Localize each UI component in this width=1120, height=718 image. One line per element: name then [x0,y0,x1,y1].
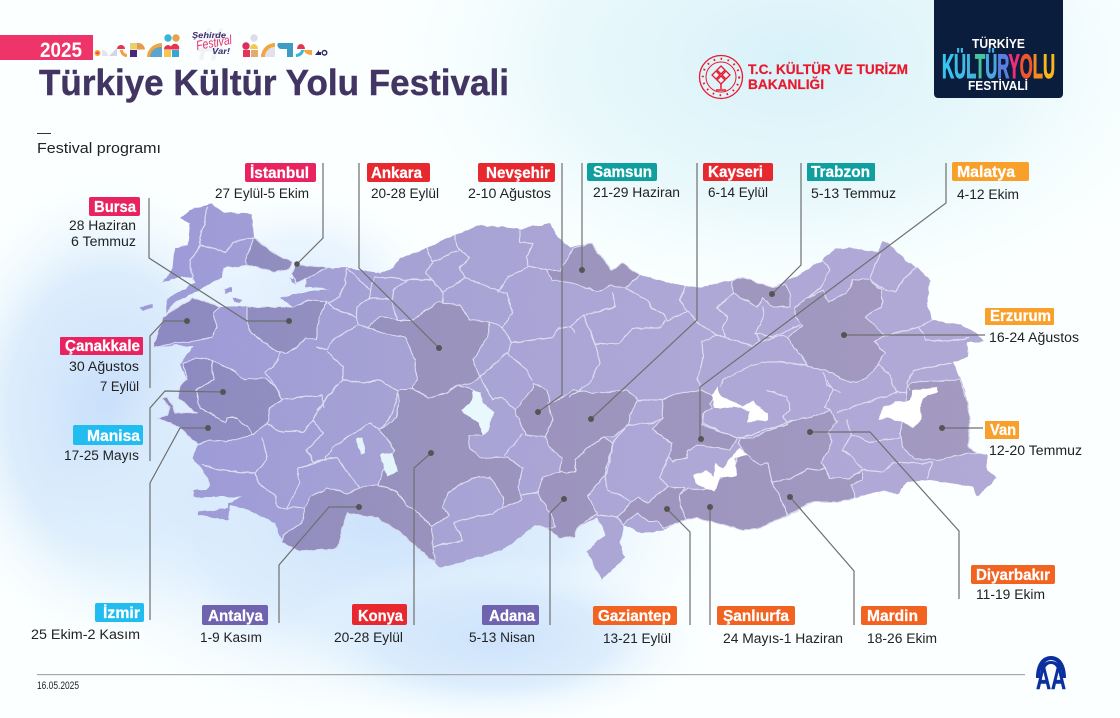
label: Malatya: Malatya [957,164,1015,181]
label: Adana [469,605,539,645]
leader: Adana [550,496,567,625]
label: Mardin: 18-26 Ekim [867,631,937,646]
label: Kayseri [703,163,773,200]
year banner: 2025 [40,39,82,62]
leader: Bursa [149,198,292,324]
label: İstanbul: İstanbul [250,165,309,182]
label: Trabzon: Trabzon [811,164,870,181]
label: Ankara: Ankara [371,165,422,182]
label: Mardin: Mardin [867,608,918,625]
label: Konya: Konya [358,608,403,625]
label: Konya: 20-28 Eylül [334,630,403,645]
logo: festival badge [934,0,1063,98]
label: Gaziantep: 13-21 Eylül [603,631,671,646]
label: Ankara [367,163,439,201]
icon: ministry emblem [700,56,742,98]
label: Şanlıurfa: Şanlıurfa [723,608,789,625]
label: Çanakkale: 30 Ağustos [69,359,139,374]
region: Anatolia [153,223,997,580]
label: İstanbul [215,163,316,201]
label: Nevşehir [468,163,555,201]
logo: festival badge: TÜRKİYE [972,36,1025,51]
label: Ankara: 20-28 Eylül [371,186,439,201]
slogan: Şehirde Festival Var: Festival [195,32,234,53]
subtitle: Festival programı: Festival programı [37,140,161,157]
province borders [190,208,968,547]
label: Van: 12-20 Temmuz [989,443,1082,458]
map of Türkiye [140,204,997,580]
label: İstanbul: 27 Eylül-5 Ekim [215,186,309,201]
label: İzmir: İzmir [103,605,140,622]
leader: Çanakkale [150,318,190,388]
leader lines and markers [149,163,985,625]
label: Gaziantep: Gaziantep [598,608,671,625]
label: Samsun: 21-29 Haziran [593,185,680,200]
label: Nevşehir: Nevşehir [486,165,550,182]
lake: Van [878,387,938,428]
label: Van: Van [990,422,1016,439]
leader: Trabzon [769,163,801,297]
leader: Şanlıurfa [707,504,713,625]
label: Şanlıurfa [717,606,843,646]
islands [140,277,297,311]
label: Bursa: 6 Temmuz [71,234,136,249]
logo: ministry [700,56,908,98]
label: Kayseri: 6-14 Eylül [708,185,768,200]
logo: Anadolu Agency: AA [1036,661,1066,696]
leader: İstanbul [294,163,323,267]
label: İzmir: 25 Ekim-2 Kasım [31,627,140,642]
label: Konya [334,604,407,645]
label: Kayseri: Kayseri [708,164,763,181]
label: Trabzon: 5-13 Temmuz [811,186,896,201]
leader: Gaziantep [664,506,690,625]
label: Çanakkale [60,337,143,394]
leader: Mardin [787,494,854,625]
decorative festival motifs [94,34,327,57]
leader: Manisa [150,389,226,461]
leader: Erzurum [841,332,985,338]
label: Adana: Adana [489,608,535,625]
label: Antalya [200,605,268,645]
label: İzmir [31,603,144,642]
leader: Antalya [279,504,362,623]
label: Samsun: Samsun [593,164,652,181]
label: Malatya [952,162,1029,202]
label: Bursa: Bursa [94,199,136,216]
date: 16.05.2025 [37,680,79,692]
slogan: Şehirde Festival Var: Şehirde [192,30,226,40]
label: Erzurum [985,308,1079,345]
label: Diyarbakır: Diyarbakır [976,567,1050,584]
year banner [0,35,93,62]
label: Antalya: 1-9 Kasım [200,630,262,645]
leader: Konya [414,450,434,625]
label: Manisa [64,425,143,463]
region: Thrace [162,204,293,313]
label: Diyarbakır: 11-19 Ekim [976,587,1045,602]
label: Adana: 5-13 Nisan [469,630,535,645]
highlighted provinces [153,238,977,562]
slogan: Şehirde Festival Var: Var! [212,47,230,56]
leader: Kayseri [588,163,697,422]
leader: İzmir [150,425,211,620]
lake: Tuz [462,390,493,435]
label: Nevşehir: 2-10 Ağustos [468,186,551,201]
footer rule [37,674,1025,675]
label: Diyarbakır [971,565,1055,602]
label: Erzurum: 16-24 Ağustos [989,330,1079,345]
label: Çanakkale: Çanakkale [65,338,140,355]
slogan: Şehirde Festival Var: # [196,18,226,70]
logo: festival badge: KÜLTÜRYOLU [942,48,1055,86]
leader: Nevşehir [535,163,562,415]
label: Antalya: Antalya [208,608,263,625]
label: Manisa: 17-25 Mayıs [64,448,139,463]
label: Malatya: 4-12 Ekim [957,187,1019,202]
logo: Anadolu Agency [1036,656,1066,696]
label: Şanlıurfa: 24 Mayıs-1 Haziran [723,631,843,646]
lake: Atatürk [693,448,747,492]
label: Erzurum: Erzurum [990,308,1051,325]
ministry name: BAKANLIĞI [748,77,824,92]
leader: Samsun [579,163,585,273]
label: Çanakkale: 7 Eylül [100,379,139,394]
title: Türkiye Kültür Yolu Festivali [39,62,509,103]
label: Van [985,421,1082,458]
label: Bursa [69,197,140,249]
label: Gaziantep [593,606,677,646]
subtitle: Festival programı [37,133,161,157]
leader: Van [939,425,983,431]
label: Samsun [587,163,680,200]
leader: Ankara [359,163,442,351]
lake: Keban [712,387,768,422]
label: Manisa: Manisa [87,428,140,445]
label: Bursa: 28 Haziran [69,218,136,233]
slogan: Şehirde Festival Var [192,18,234,70]
lake: Eğirdir [357,437,365,455]
leader: Diyarbakır [807,429,959,599]
label: Mardin [861,606,937,646]
label: Trabzon [807,163,896,201]
lake: Beyşehir [380,453,398,477]
ministry name: T.C. KÜLTÜR VE TURİZM [748,62,908,77]
leader: Malatya [698,163,946,442]
logo: festival badge: FESTİVALİ [968,78,1028,93]
